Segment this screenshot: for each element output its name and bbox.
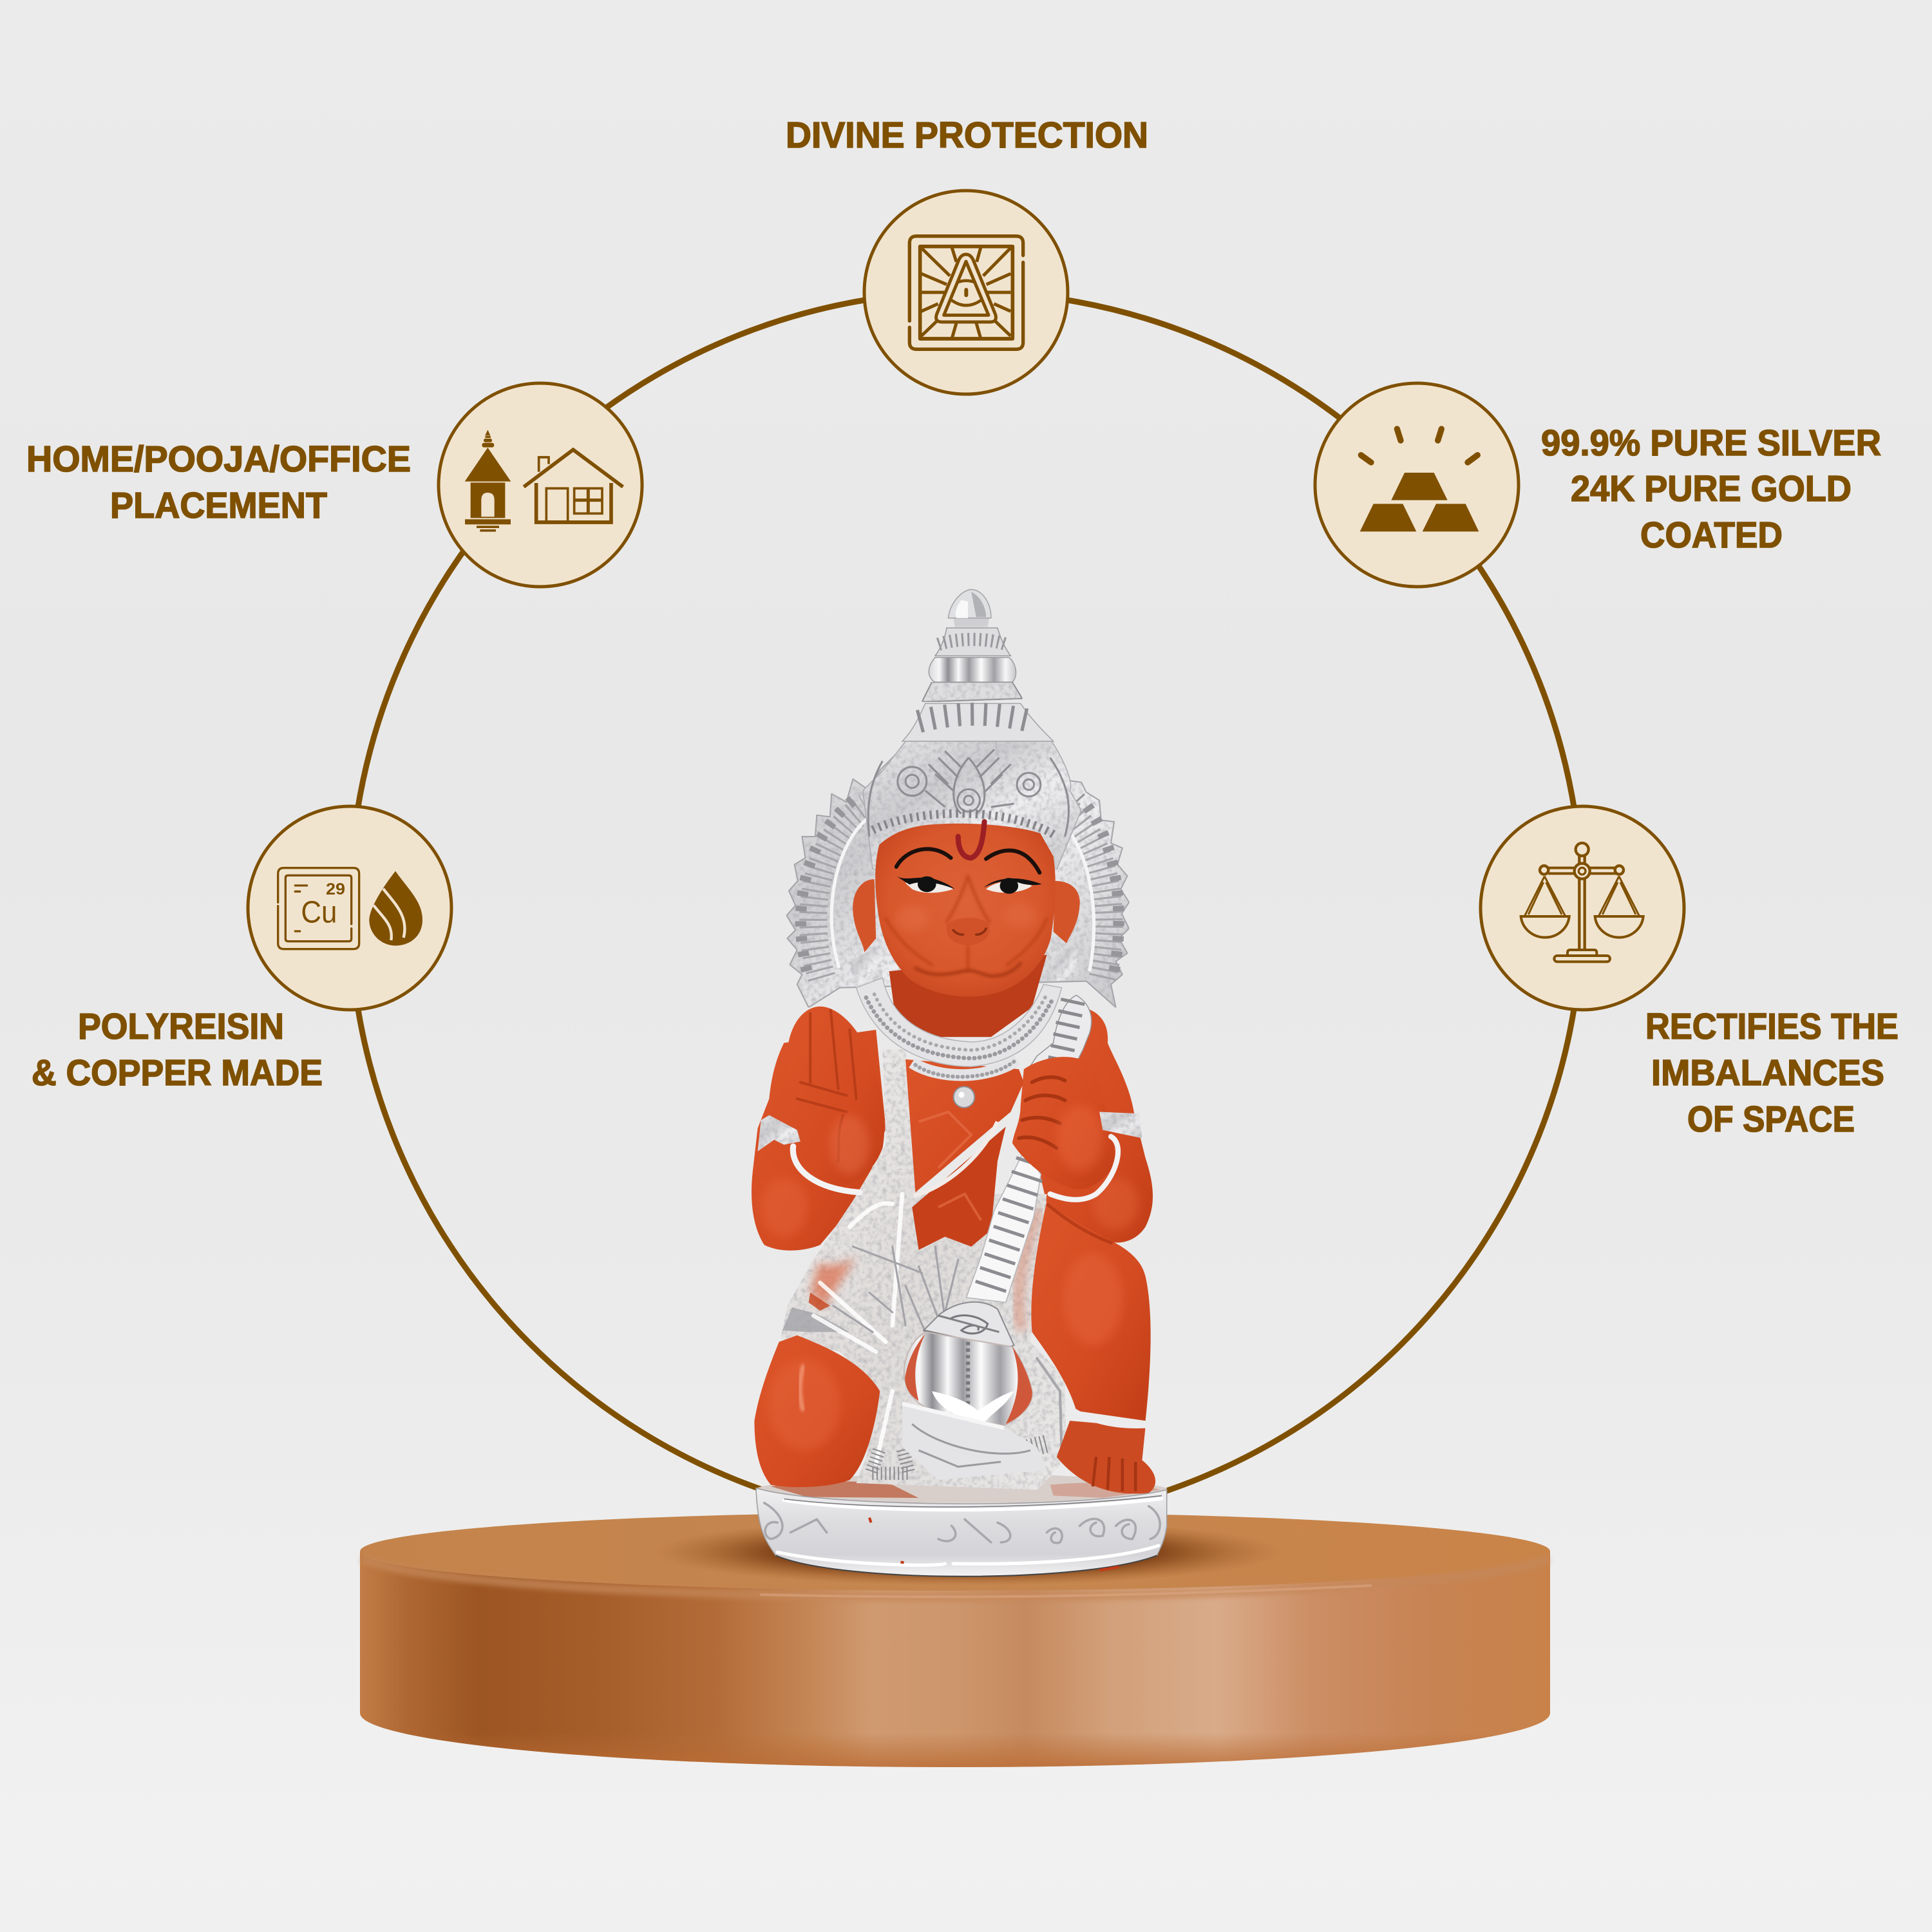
mace fringe [902, 1403, 1047, 1480]
crown flutes [902, 703, 1054, 741]
mace cap [923, 1302, 1014, 1350]
left raised hand [787, 1007, 884, 1186]
crown dome [863, 741, 1081, 869]
statue: silver hanuman idol [752, 589, 1167, 1577]
label: polyreisin and copper: POLYREISIN [78, 1006, 284, 1047]
crown engraving [868, 750, 1069, 837]
label: rectifies imbalances: OF SPACE [1687, 1099, 1855, 1140]
icon: copper element and drop [278, 868, 422, 949]
left eye [905, 879, 953, 893]
icon: all-seeing eye yantra [909, 236, 1023, 349]
chest [905, 1059, 1024, 1193]
left armband [758, 1115, 800, 1151]
muzzle shading [915, 963, 1021, 976]
mace upper handle [1024, 995, 1092, 1075]
label: silver and gold purity: 99.9% PURE SILVER [1541, 422, 1881, 464]
left knee [754, 1335, 880, 1487]
earrings [849, 945, 882, 988]
podium [360, 1512, 1550, 1767]
head, crown and necklace [849, 589, 1081, 1077]
pendant [954, 1086, 974, 1108]
label: rectifies imbalances: IMBALANCES [1651, 1052, 1884, 1094]
body, legs and dhoti [752, 995, 1167, 1577]
icon circle: home, pooja and office [439, 383, 642, 587]
label: polyreisin and copper [32, 1006, 323, 1094]
lower chain [912, 1060, 1018, 1075]
right hand gripping mace [1012, 1057, 1116, 1189]
ring connecting the features [350, 292, 1582, 1524]
icon: copper element and drop: 29 [326, 881, 345, 898]
crown tier one [935, 628, 1010, 656]
neck [889, 955, 1047, 1037]
arm highlights [761, 1178, 807, 1236]
label: home pooja office placement [26, 439, 411, 526]
label: silver and gold purity: 24K PURE GOLD [1571, 468, 1852, 509]
base top plate [756, 1473, 1167, 1503]
label: silver and gold purity [1541, 422, 1881, 556]
icon circle: pure silver and gold [1315, 383, 1519, 587]
dhoti silver [781, 1050, 1066, 1490]
right leg [1031, 1200, 1151, 1421]
ears [853, 879, 876, 952]
label: home pooja office placement: HOME/POOJA/OFFICE [26, 439, 411, 480]
base drum [756, 1488, 1167, 1577]
apron [912, 1126, 1006, 1250]
left bangle [793, 1146, 860, 1193]
halo [786, 712, 1129, 1007]
label: rectifies imbalances: RECTIFIES THE [1645, 1006, 1899, 1047]
icon circle: polyresin and copper [248, 806, 451, 1010]
tilak [958, 822, 985, 858]
icon: copper element and drop: Cu [301, 895, 337, 930]
arms [752, 1030, 886, 1251]
heading: divine protection: DIVINE PROTECTION [786, 115, 1148, 156]
icon: balance scale [1521, 843, 1643, 961]
mace handle [967, 1151, 1041, 1302]
face [875, 824, 1056, 997]
right eye [986, 881, 1032, 893]
icon circle: divine protection [864, 191, 1068, 394]
label: home pooja office placement: PLACEMENT [110, 485, 327, 526]
icon: temple and house [465, 430, 623, 532]
right bangle [1050, 1137, 1118, 1200]
label: silver and gold purity: COATED [1640, 515, 1783, 556]
right foot [1057, 1421, 1155, 1494]
crown finial [953, 617, 989, 627]
label: rectifies imbalances [1645, 1006, 1899, 1140]
icon circle: rectifies space imbalances [1481, 806, 1684, 1010]
label: polyreisin and copper: & COPPER MADE [32, 1052, 323, 1094]
icon: gold bars [1360, 429, 1479, 531]
crown smooth tier [929, 658, 1016, 682]
eyebrows [896, 849, 951, 867]
mace head [902, 1332, 1032, 1428]
crown tier three [922, 682, 1022, 702]
necklace [857, 978, 1061, 1066]
right armband [1099, 1112, 1142, 1138]
